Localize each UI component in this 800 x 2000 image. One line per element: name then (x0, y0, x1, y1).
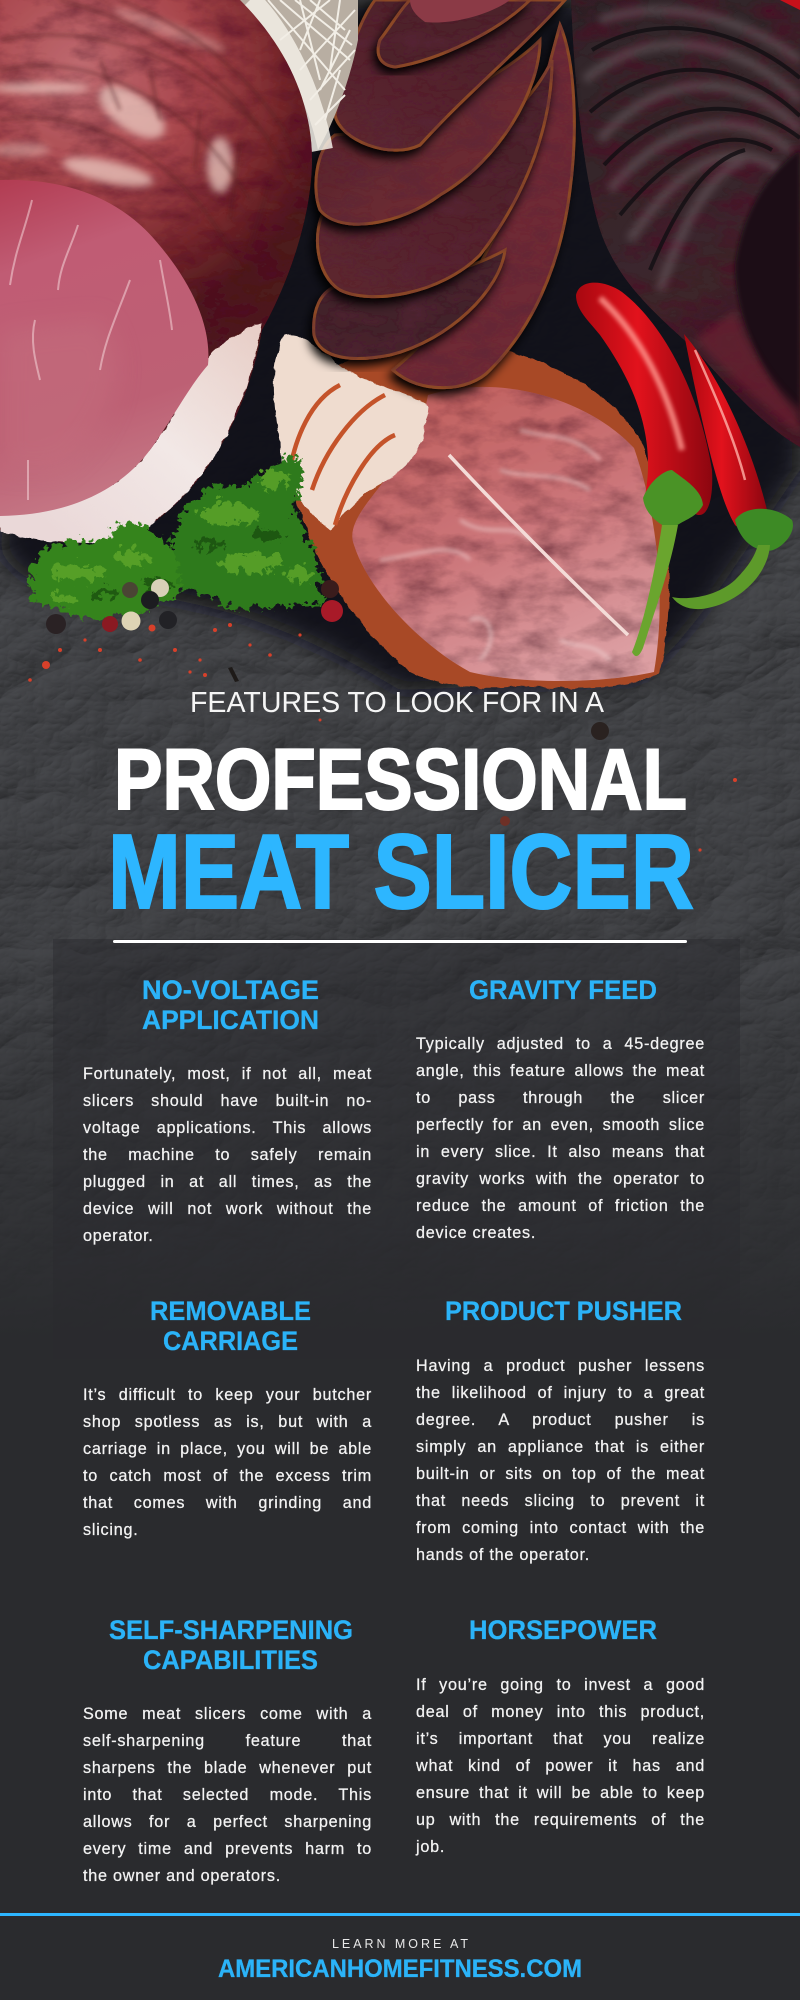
body text: shop spotless as is, but with a (83, 1413, 372, 1431)
ham fat rim (0, 322, 262, 543)
body text: hands of the operator. (416, 1546, 590, 1564)
body text: Typically adjusted to a 45-degree (416, 1035, 705, 1053)
peppercorns and spice flecks (28, 579, 737, 887)
body text: to pass through the slicer (416, 1089, 705, 1107)
heading: GRAVITY FEED (469, 975, 657, 1005)
pink cut face (352, 387, 660, 681)
body text: self-sharpening feature that (83, 1732, 372, 1750)
body text: device creates. (416, 1224, 536, 1242)
panel: self-sharpening capabilities (83, 1615, 372, 1885)
body text: what kind of power it has and (416, 1756, 705, 1774)
heading: APPLICATION (142, 1005, 319, 1035)
concrete texture (0, 0, 800, 1360)
left chili (576, 283, 712, 515)
body text: carriage in place, you will be able (83, 1440, 372, 1458)
body text: built-in or sits on top of the meat (416, 1464, 705, 1482)
body text: into that selected mode. This (83, 1786, 372, 1804)
body text: the owner and operators. (83, 1867, 281, 1885)
heading: PRODUCT PUSHER (445, 1296, 682, 1326)
body text: voltage applications. This allows (83, 1119, 372, 1137)
body text: plugged in at all times, as the (83, 1173, 372, 1191)
heading: NO-VOLTAGE (142, 975, 319, 1005)
net behind ham (235, 0, 358, 150)
body text: angle, this feature allows the meat (416, 1062, 705, 1080)
heading: REMOVABLE (150, 1296, 311, 1326)
body text: slicers should have built-in no- (83, 1092, 372, 1110)
learn more label: LEARN MORE AT (332, 1937, 468, 1951)
heading: SELF-SHARPENING (109, 1615, 353, 1645)
body text: from coming into contact with the (416, 1518, 705, 1536)
panel: product pusher (416, 1296, 705, 1564)
body text (82, 1065, 372, 1245)
heading: CAPABILITIES (143, 1645, 318, 1675)
body text: ensure that it will be able to keep (416, 1784, 705, 1802)
panel: gravity feed (416, 975, 705, 1242)
body text: reduce the amount of friction the (416, 1197, 705, 1215)
body text: slicing. (83, 1521, 138, 1539)
main title block (108, 687, 694, 943)
body text: Having a product pusher lessens (416, 1356, 705, 1374)
heading: HORSEPOWER (469, 1615, 657, 1645)
title line: Professional: PROFESSIONAL (114, 732, 687, 828)
right chili (684, 334, 767, 530)
body text (416, 1035, 705, 1242)
body text (83, 1386, 372, 1539)
body text: that needs slicing to prevent it (416, 1492, 705, 1510)
shadow behind food (0, 0, 800, 690)
heading: CARRIAGE (163, 1326, 298, 1356)
subtitle: FEATURES TO LOOK FOR IN A (190, 687, 605, 719)
body text: allows for a perfect sharpening (83, 1813, 372, 1831)
body text: it’s important that you realize (416, 1730, 705, 1748)
white fat line (449, 455, 628, 635)
body text: deal of money into this product, (416, 1702, 705, 1720)
ham (0, 0, 312, 543)
body text: the likelihood of injury to a great (416, 1384, 705, 1402)
body text: sharpens the blade whenever put (83, 1759, 372, 1777)
meat crust (289, 346, 669, 688)
body text: job. (416, 1838, 445, 1856)
body text: Fortunately, most, if not all, meat (83, 1065, 372, 1083)
translucent text panel (53, 939, 740, 1359)
heading (109, 1615, 353, 1675)
ham cut face (0, 180, 208, 516)
round sliced meat (274, 334, 669, 688)
body text: device will not work without the (83, 1200, 372, 1218)
title rule (113, 940, 687, 943)
body text (83, 1705, 372, 1885)
body text (415, 1676, 705, 1856)
body text (416, 1356, 705, 1564)
marbling (0, 3, 233, 193)
title line: Meat Slicer: MEAT SLICER (108, 813, 694, 931)
fat with spice stripes (274, 334, 428, 530)
photo and concrete background (0, 0, 800, 1226)
body text: operator. (83, 1227, 154, 1245)
heading (142, 975, 319, 1035)
body text: the machine to safely remain (83, 1146, 372, 1164)
website: AMERICANHOMEFITNESS.COM (218, 1955, 582, 1983)
heading (150, 1296, 311, 1356)
body text: that comes with grinding and (83, 1494, 372, 1512)
panel: removable carriage (83, 1296, 372, 1539)
right dark beef (571, 0, 800, 447)
body text: It’s difficult to keep your butcher (83, 1386, 372, 1404)
panel: horsepower (415, 1615, 705, 1856)
body text: up with the requirements of the (416, 1810, 705, 1828)
footer rule (0, 1913, 800, 1916)
body text: to catch most of the excess trim (83, 1467, 372, 1485)
body text: degree. A product pusher is (416, 1410, 705, 1428)
body text: Some meat slicers come with a (83, 1705, 372, 1723)
panel: no-voltage application (82, 975, 372, 1245)
body text: in every slice. It also means that (416, 1143, 705, 1161)
ham crust (0, 0, 312, 543)
body text: simply an appliance that is either (416, 1438, 705, 1456)
parsley (27, 448, 320, 616)
body text: If you’re going to invest a good (416, 1676, 705, 1694)
body text: gravity works with the operator to (416, 1170, 705, 1188)
body text: perfectly for an even, smooth slice (416, 1116, 705, 1134)
chili peppers (576, 283, 793, 656)
body text: every time and prevents harm to (83, 1840, 372, 1858)
dark cured slices (314, 0, 574, 388)
